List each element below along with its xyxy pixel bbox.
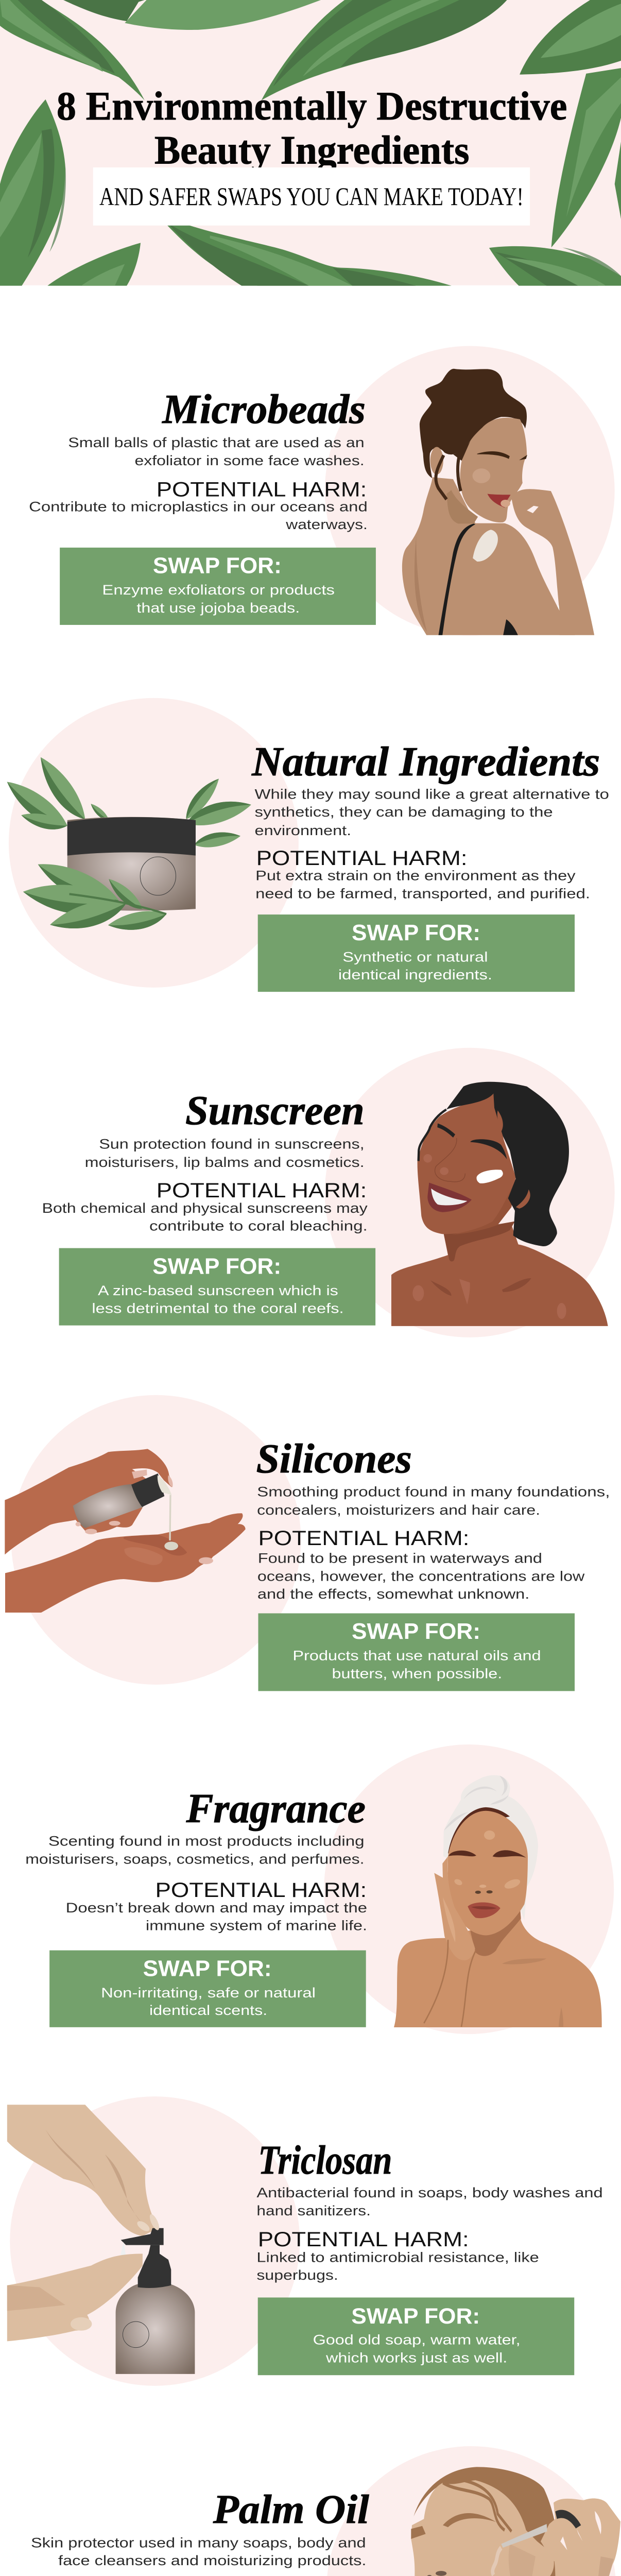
swap box (258, 914, 575, 992)
description: face cleansers and moisturizing products. (58, 2552, 366, 2568)
swap box (60, 548, 376, 625)
potential harm: POTENTIAL HARM: (155, 1879, 367, 1902)
heading: Fragrance (185, 1785, 366, 1831)
potential harm: POTENTIAL HARM: (157, 1179, 367, 1202)
subtitle box: AND SAFER SWAPS YOU CAN MAKE TODAY! (99, 182, 524, 211)
pink circle (325, 346, 615, 636)
description: hand sanitizers. (256, 2202, 371, 2218)
swap box: SWAP FOR: (152, 1253, 281, 1279)
title: 8 Environmentally Destructive (57, 84, 567, 129)
pink circle (11, 1395, 301, 1685)
panel: Microbeads (29, 346, 615, 636)
panel: Palm Oil (31, 2446, 620, 2576)
description (85, 1136, 365, 1170)
panel: Natural Ingredients (1, 698, 609, 992)
swap box: Non-irritating, safe or natural (101, 1985, 316, 2001)
potential harm: Both chemical and physical sunscreens may (42, 1200, 368, 1216)
heading: Silicones (256, 1435, 412, 1481)
description: moisturisers, lip balms and cosmetics. (85, 1154, 365, 1170)
swap box: SWAP FOR: (351, 2304, 480, 2329)
description: While they may sound like a great alternative to (255, 786, 609, 802)
swap box: Enzyme exfoliators or products (102, 582, 335, 598)
potential harm: Doesn’t break down and may impact the (66, 1900, 367, 1916)
description: exfoliator in some face washes. (135, 452, 365, 468)
swap box: Synthetic or natural (342, 948, 488, 964)
description (31, 2535, 366, 2568)
illustration: hands with bottle (5, 1449, 246, 1613)
potential harm: need to be farmed, transported, and purified. (255, 886, 590, 902)
panel: Silicones (5, 1395, 610, 1691)
swap box: butters, when possible. (332, 1666, 502, 1682)
swap box: less detrimental to the coral reefs. (92, 1300, 344, 1316)
description: Small balls of plastic that are used as an (68, 434, 365, 450)
description: environment. (255, 822, 351, 838)
subtitle box (93, 167, 530, 226)
illustration: woman with cream on shoulder (402, 369, 594, 635)
panel: Sunscreen (42, 1048, 615, 1337)
swap box (49, 1951, 366, 2027)
panel: header banner (0, 0, 621, 286)
header leaves (0, 0, 621, 286)
potential harm: immune system of marine life. (146, 1918, 367, 1934)
potential harm: Put extra strain on the environment as they (255, 868, 576, 884)
heading: Palm Oil (213, 2487, 370, 2532)
swap box: Good old soap, warm water, (313, 2332, 521, 2347)
description: Antibacterial found in soaps, body washes and (256, 2184, 603, 2200)
illustration: hands with pump bottle (7, 2105, 195, 2374)
description: Smoothing product found in many foundations, (257, 1483, 610, 1499)
description: Skin protector used in many soaps, body and (31, 2535, 366, 2551)
pink circle (9, 698, 299, 988)
swap box (59, 1248, 375, 1326)
illustration: woman with towel (394, 1775, 602, 2027)
potential harm: contribute to coral bleaching. (149, 1218, 368, 1234)
potential harm: POTENTIAL HARM: (256, 847, 468, 870)
description (256, 2184, 603, 2218)
heading: Natural Ingredients (251, 738, 600, 784)
heading: Sunscreen (185, 1088, 365, 1133)
description: synthetics, they can be damaging to the (255, 804, 553, 820)
description: concealers, moisturizers and hair care. (257, 1502, 540, 1518)
swap box: A zinc-based sunscreen which is (98, 1282, 338, 1298)
potential harm (42, 1179, 368, 1234)
description (25, 1833, 365, 1867)
pink circle (325, 1048, 615, 1337)
heading: Microbeads (161, 386, 366, 432)
description (68, 434, 365, 468)
swap box: identical scents. (149, 2002, 267, 2018)
potential harm: waterways. (285, 516, 368, 532)
potential harm (29, 478, 368, 532)
potential harm (255, 847, 590, 902)
potential harm: POTENTIAL HARM: (258, 2228, 469, 2251)
pink circle (10, 2096, 300, 2386)
swap box (258, 2297, 574, 2375)
potential harm: Linked to antimicrobial resistance, like (256, 2249, 539, 2265)
panel: Triclosan (7, 2096, 603, 2386)
potential harm: POTENTIAL HARM: (258, 1527, 469, 1550)
swap box (258, 1613, 575, 1691)
description (257, 1483, 610, 1518)
swap box: Products that use natural oils and (292, 1648, 541, 1664)
swap box: which works just as well. (325, 2350, 507, 2366)
swap box: SWAP FOR: (352, 1619, 480, 1644)
description: Sun protection found in sunscreens, (99, 1136, 365, 1152)
heading: Triclosan (258, 2138, 392, 2183)
potential harm (66, 1879, 367, 1934)
illustration: jar with leaves (1, 752, 253, 938)
description (255, 786, 609, 838)
pink circle (326, 2446, 616, 2576)
swap box: SWAP FOR: (153, 553, 282, 578)
title: Beauty Ingredients (154, 128, 469, 173)
potential harm: oceans, however, the concentrations are low (257, 1568, 584, 1584)
illustration: woman with sunscreen on cheek (391, 1082, 608, 1326)
potential harm: Contribute to microplastics in our oceans and (29, 499, 368, 515)
illustration: woman with dropper (402, 2467, 620, 2576)
swap box: SWAP FOR: (143, 1956, 272, 1981)
pink circle (324, 1744, 614, 2034)
swap box: SWAP FOR: (352, 920, 480, 945)
potential harm (256, 2228, 539, 2283)
potential harm: POTENTIAL HARM: (157, 478, 367, 501)
potential harm: superbugs. (256, 2267, 338, 2283)
swap box: that use jojoba beads. (136, 600, 300, 616)
panel: Fragrance (25, 1744, 614, 2034)
title (57, 84, 567, 173)
description: moisturisers, soaps, cosmetics, and perfumes. (25, 1851, 365, 1867)
description: Scenting found in most products including (48, 1833, 365, 1849)
swap box: identical ingredients. (338, 967, 492, 982)
potential harm (257, 1527, 584, 1602)
potential harm: and the effects, somewhat unknown. (257, 1586, 529, 1602)
potential harm: Found to be present in waterways and (258, 1550, 542, 1566)
